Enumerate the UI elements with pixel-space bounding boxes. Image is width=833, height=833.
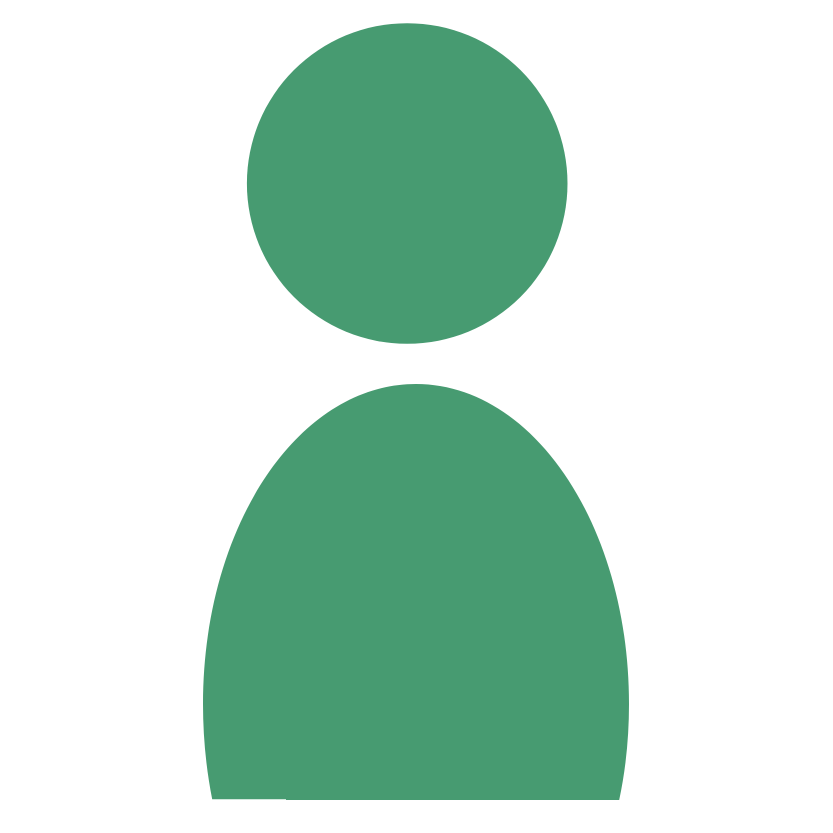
icon: person body <box>203 384 629 800</box>
icon: person head <box>247 23 567 344</box>
